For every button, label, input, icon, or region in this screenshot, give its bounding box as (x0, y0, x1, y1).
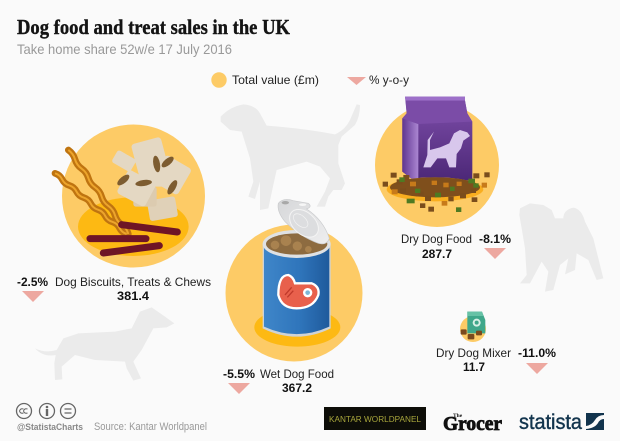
logo: Kantar Worldpanel (324, 407, 426, 430)
panel: dry dog food (375, 97, 511, 261)
panel: wet dog food (223, 199, 362, 395)
illustration: can lid (278, 199, 329, 244)
silhouette: pug (519, 203, 603, 292)
subtitle: Take home share 52w/e 17 July 2016 (17, 41, 232, 57)
change label: -8.1%: -8.1% (479, 232, 511, 246)
panel: dry dog mixer (436, 312, 556, 374)
logo: Kantar Worldpanel: KANTAR WORLDPANEL (329, 414, 421, 424)
category label: Dry Dog Mixer (436, 346, 511, 360)
footer: handle: @StatistaCharts (17, 422, 83, 432)
logo: Statista: statista (519, 411, 582, 434)
illustration: can (254, 230, 340, 347)
value: 287.7: 287.7 (422, 247, 452, 261)
yellow circle: biscuits (62, 124, 205, 268)
title: Dog food and treat sales in the UK (17, 15, 290, 39)
legend: % y-o-y (369, 73, 409, 87)
logo: The Grocer: Grocer (443, 413, 502, 435)
value: 381.4: 381.4 (117, 289, 149, 303)
yellow circle: dry food (375, 103, 499, 227)
down arrow (484, 248, 506, 259)
panel: dog biscuits, treats and chews (17, 124, 211, 303)
category label: Dry Dog Food (401, 232, 472, 246)
change label: -2.5%: -2.5% (17, 275, 48, 289)
category label: Wet Dog Food (260, 367, 334, 381)
value: 367.2: 367.2 (282, 381, 312, 395)
illustration: mixer bag (461, 312, 485, 339)
illustration: biscuits and chews (55, 137, 192, 256)
down arrow (228, 383, 250, 394)
legend: Total value (£m) (232, 73, 319, 87)
down arrow (526, 363, 548, 374)
legend (211, 72, 409, 88)
yellow circle: wet food (226, 224, 362, 362)
silhouette: labrador (221, 104, 360, 210)
value: 11.7: 11.7 (463, 360, 485, 374)
change label: -11.0%: -11.0% (518, 346, 556, 360)
yellow circle: mixer (460, 316, 486, 342)
logo: The Grocer: The (453, 413, 463, 419)
category label: Dog Biscuits, Treats & Chews (55, 275, 211, 289)
illustration: bag and kibble (383, 97, 490, 212)
silhouette: dachshund (35, 307, 174, 381)
footer: licence icons (16, 404, 76, 418)
footer: source: Source: Kantar Worldpanel (94, 421, 207, 433)
down arrow (22, 291, 44, 302)
change label: -5.5%: -5.5% (223, 367, 255, 381)
